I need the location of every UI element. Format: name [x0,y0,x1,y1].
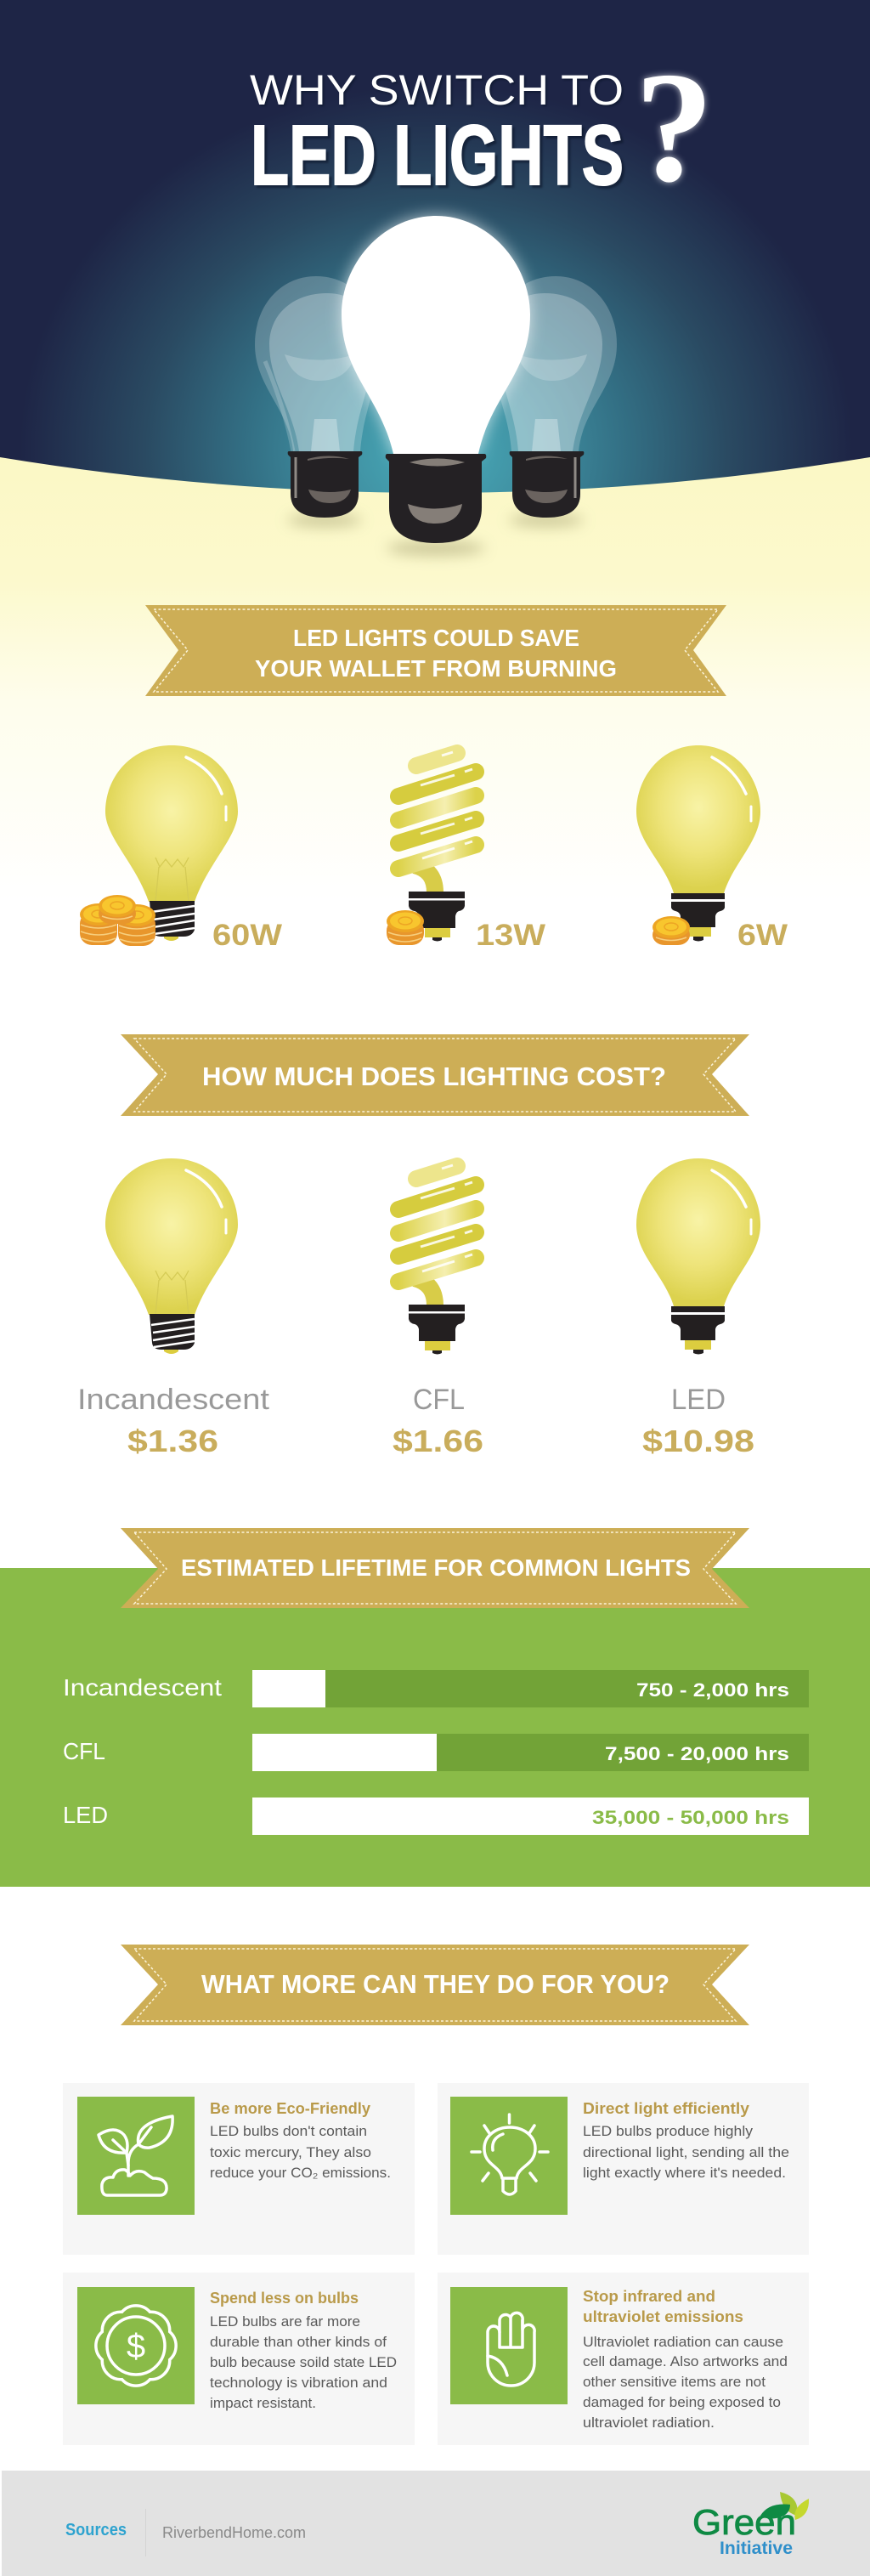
banner: LED lights could save [145,605,726,696]
card body: LED bulbs don't contain [210,2124,367,2139]
base shadows [287,513,584,556]
card title: Direct light efficiently [583,2100,749,2117]
LED bulb cost [636,1158,760,1458]
card body: directional light, sending all the [583,2145,789,2160]
question mark: ? [635,40,714,215]
price: $10.98 [642,1424,754,1458]
card title: Stop infrared and [583,2288,715,2305]
LED bulb with coin [636,745,760,945]
card: eco friendly [63,2083,415,2255]
row: CFL: 7,500 - 20,000 hrs [605,1743,789,1764]
header background [0,0,870,544]
card body: impact resistant. [210,2396,316,2411]
row: incandescent: Incandescent [63,1674,222,1701]
card: direct light [438,2083,809,2255]
left base [288,451,362,518]
icon: dollar gear [96,2306,176,2386]
name: CFL [413,1384,465,1416]
card body: cell damage. Also artworks and [583,2354,788,2369]
ghost bulb right [491,276,617,451]
row: incandescent: 750 - 2,000 hrs [636,1679,789,1701]
card: spend less [63,2273,415,2445]
CFL bulb with coin [387,752,476,945]
card body: other sensitive items are not [583,2375,765,2390]
card body: reduce your CO₂ emissions. [210,2166,391,2181]
row: incandescent [63,1670,809,1707]
logo: Green Initiative [692,2492,809,2558]
card title: Spend less on bulbs [210,2290,359,2307]
card body [583,2124,789,2181]
card title: ultraviolet emissions [583,2308,743,2325]
card body: damaged for being exposed to [583,2395,781,2410]
main bulb glow [342,216,530,454]
title line 1: WHY SWITCH TO [250,66,624,114]
label 60W: 60W [212,919,282,952]
banner text: WHAT MORE CAN THEY DO FOR YOU? [201,1969,669,1999]
card body: toxic mercury, They also [210,2145,371,2160]
right base [510,451,584,518]
name: Incandescent [77,1384,270,1416]
cream curved background [0,457,870,901]
row: LED: LED [63,1802,108,1828]
card body [210,2314,397,2411]
coin [652,916,690,945]
ghost bulb left [255,276,379,451]
title line 2: LED LIGHTS [251,108,624,203]
card body: light exactly where it's needed. [583,2166,786,2181]
card body: Ultraviolet radiation can cause [583,2335,783,2350]
coin [387,910,424,945]
card title: Be more Eco-Friendly [210,2100,370,2117]
row: CFL: CFL [63,1738,105,1764]
icon: hand [488,2313,534,2386]
card body [583,2335,788,2431]
banner: lighting cost [121,1034,749,1116]
card body: durable than other kinds of [210,2335,387,2350]
price: $1.66 [393,1424,483,1458]
icon: dollar gear: $ [127,2328,145,2365]
label 13W: 13W [476,919,545,952]
banner: what more [121,1945,749,2025]
banner: lifetime [121,1528,749,1608]
logo: Green Initiative: Green [692,2502,796,2542]
row: LED [63,1798,809,1835]
question mark: ? [635,40,714,215]
row: LED: 35,000 - 50,000 hrs [592,1807,789,1828]
card body [210,2124,391,2181]
icon: light bulb [472,2115,548,2194]
logo: Green Initiative: Initiative [720,2539,793,2558]
card: stop emissions [438,2273,809,2445]
incandescent bulb cost [77,1158,270,1458]
sources label: Sources [65,2521,127,2539]
title [250,40,714,215]
price: $1.36 [127,1424,218,1458]
main bulb [342,216,530,454]
footer [2,2471,870,2576]
header glow [0,0,870,544]
banner text: YOUR WALLET FROM BURNING [255,655,617,682]
panel: lifetime [0,1528,870,1887]
card body: ultraviolet radiation. [583,2415,715,2431]
banner text: LED LIGHTS COULD SAVE [293,625,579,651]
icon: plant [99,2116,172,2195]
coins [80,895,155,946]
card body: LED bulbs are far more [210,2314,360,2330]
card body: technology is vibration and [210,2375,387,2391]
incandescent bulb with coins [80,745,238,946]
card body: LED bulbs produce highly [583,2124,754,2139]
banner text: ESTIMATED LIFETIME FOR COMMON LIGHTS [181,1554,691,1581]
illustration: three light bulbs [255,216,617,556]
label 6W: 6W [737,919,788,952]
name: LED [671,1384,726,1416]
row: CFL [63,1734,809,1771]
card body: bulb because soild state LED [210,2355,397,2370]
source link: RiverbendHome.com [162,2524,306,2541]
banner text: HOW MUCH DOES LIGHTING COST? [202,1062,666,1091]
main base [386,454,486,543]
CFL bulb cost [393,1165,483,1458]
